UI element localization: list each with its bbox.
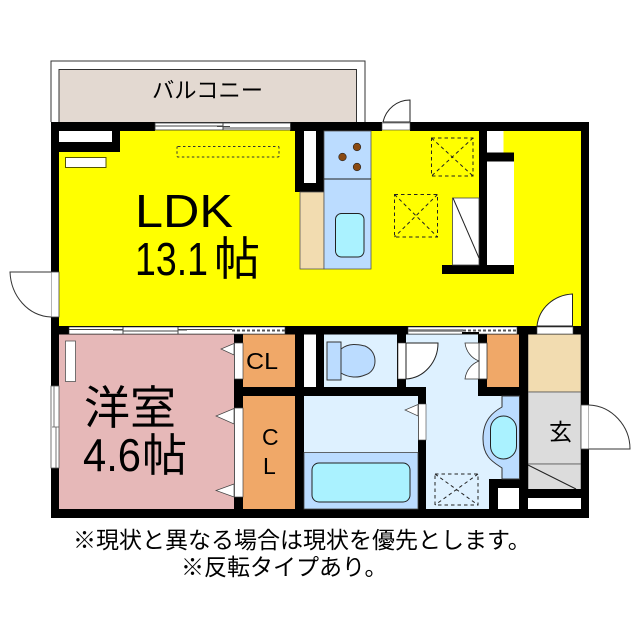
- room: entrance: [528, 392, 581, 490]
- bathroom door: [418, 404, 426, 440]
- western room label: 4.6: [83, 429, 141, 481]
- walls: [51, 122, 589, 518]
- closet label vertical: L: [263, 453, 276, 479]
- corridor sliding door: [408, 327, 517, 334]
- closet label: CL: [246, 348, 278, 374]
- room: entrance storage: [528, 334, 581, 392]
- bathroom: [304, 404, 426, 509]
- LDK bottom sliding door: [69, 327, 285, 334]
- balcony: [51, 61, 365, 122]
- washroom vanity: [483, 396, 520, 479]
- closet doors: [216, 343, 243, 497]
- western room label: 帖: [142, 430, 187, 481]
- toilet door: [398, 343, 438, 379]
- LDK label: 帖: [214, 233, 260, 285]
- entrance label: 玄: [549, 419, 572, 445]
- kitchen: [300, 131, 371, 269]
- western room label: [83, 382, 187, 481]
- air conditioner: [66, 158, 106, 168]
- toilet: [327, 342, 375, 380]
- room: western room floor: [59, 334, 235, 510]
- stove burners: [339, 143, 361, 171]
- bathtub: [312, 463, 410, 502]
- western room air conditioner: [66, 341, 76, 382]
- LDK label: 13.1: [135, 233, 208, 285]
- western room window: [51, 386, 59, 468]
- room: wet area floors: [304, 334, 521, 510]
- door: front entrance: [581, 405, 630, 449]
- room: LDK floor: [55, 126, 585, 330]
- kitchen sink: [336, 214, 364, 257]
- room: closets: [243, 334, 520, 510]
- LDK label: LDK: [135, 185, 233, 237]
- closet label vertical: C: [262, 424, 279, 450]
- western room label: 洋室: [84, 382, 176, 434]
- note line 2: ※反転タイプあり。: [181, 554, 388, 580]
- ceiling storage markers: [394, 138, 478, 505]
- ceiling fixture: [177, 146, 279, 157]
- door: balcony side: [382, 100, 410, 130]
- LDK storage door: [452, 198, 479, 265]
- closet label vertical: [262, 424, 279, 479]
- balcony label: バルコニー: [152, 78, 263, 103]
- structural voids: [59, 131, 581, 509]
- LDK label: [135, 185, 260, 285]
- washroom storage doors: [465, 343, 487, 379]
- door: LDK to entrance: [537, 294, 573, 334]
- door: left exterior: [10, 272, 59, 317]
- LDK top window: [155, 123, 290, 130]
- note line 1: ※現状と異なる場合は現状を優先とします。: [73, 527, 531, 553]
